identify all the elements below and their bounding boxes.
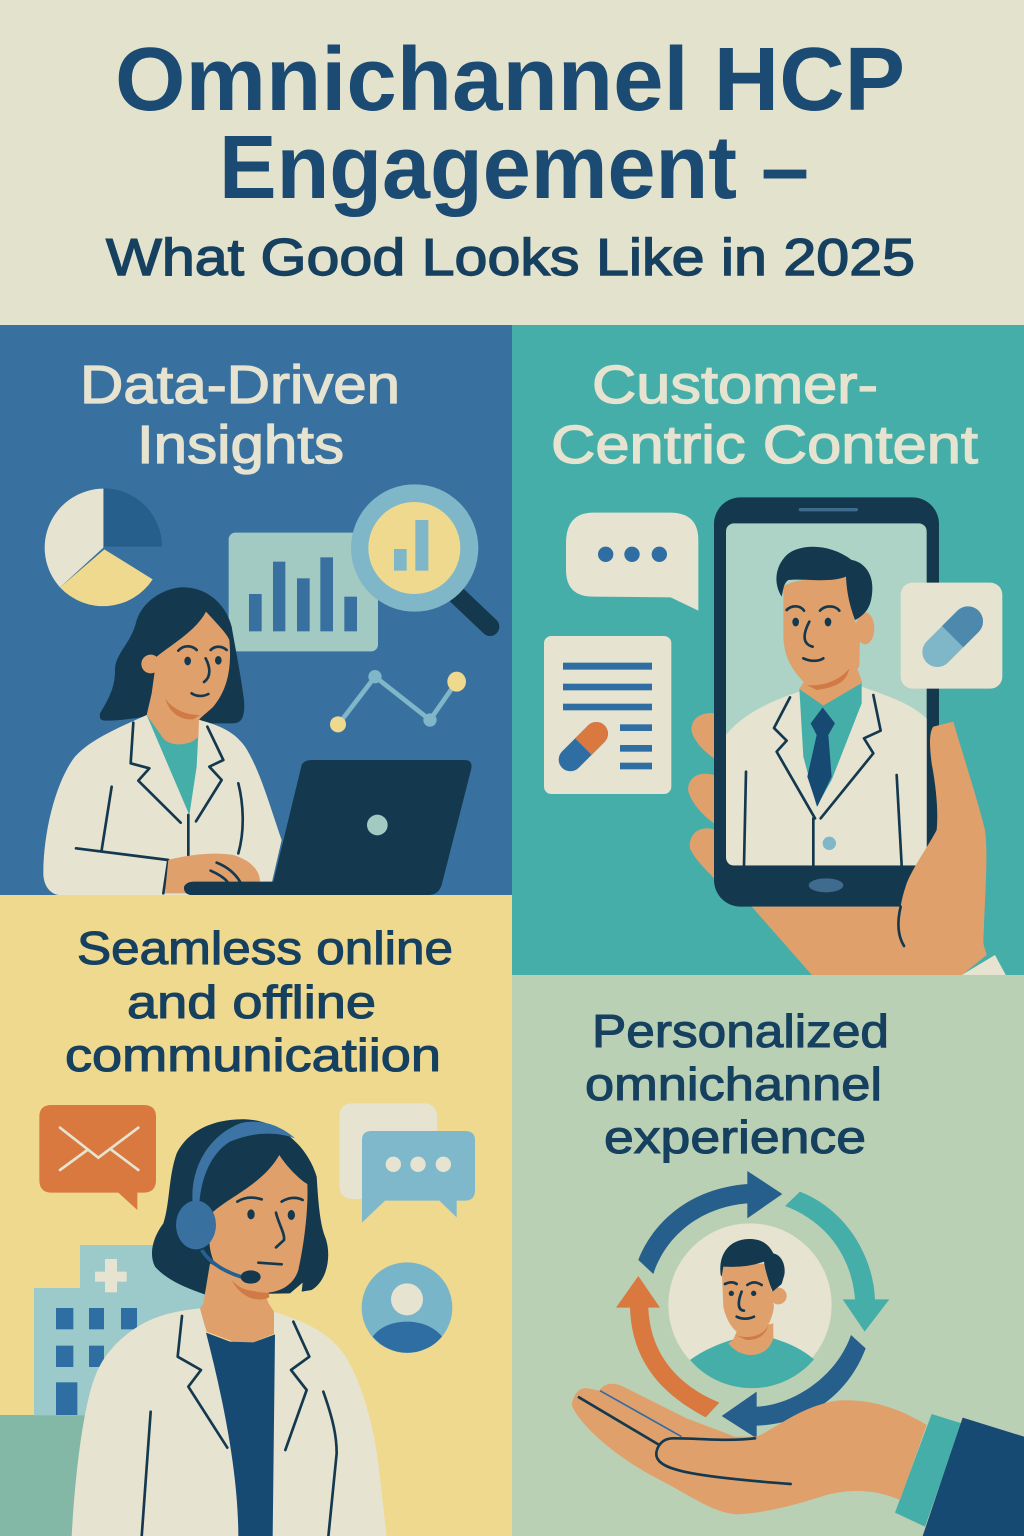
heading: personalized omnichannel experience: experience xyxy=(604,1111,866,1163)
arrow: right xyxy=(785,1192,889,1332)
title xyxy=(106,30,915,287)
arrow: bottom xyxy=(722,1335,866,1438)
avatar in circle xyxy=(668,1223,832,1388)
arrow: top xyxy=(638,1171,782,1274)
illustration: analyst with laptop and charts xyxy=(43,484,490,895)
heading: customer-centric content: Customer- xyxy=(592,355,878,415)
heading: personalized omnichannel experience: Personalized xyxy=(592,1005,889,1057)
open hand with sleeve xyxy=(572,1384,1024,1536)
heading: data-driven insights xyxy=(80,355,400,475)
heading: seamless online and offline communication xyxy=(65,922,453,1081)
illustration: cycle over open hand xyxy=(572,1171,1024,1536)
icon: chat bubble xyxy=(566,513,698,611)
heading: personalized omnichannel experience: omnichannel xyxy=(585,1058,882,1110)
heading: seamless online and offline communication: Seamless online xyxy=(77,922,453,974)
icon: pill card xyxy=(901,583,1002,689)
icon: headset xyxy=(176,1122,295,1284)
heading: customer-centric content xyxy=(551,355,978,475)
arrow: left xyxy=(616,1276,719,1417)
icon: user avatar xyxy=(362,1262,452,1353)
panel: seamless communication xyxy=(0,895,512,1536)
line chart xyxy=(330,670,466,732)
icon: chat bubbles xyxy=(339,1103,475,1223)
illustration: doctor on phone xyxy=(544,497,1007,977)
icon: smartphone xyxy=(714,497,939,907)
person: analyst xyxy=(43,587,282,895)
person: agent xyxy=(72,1119,387,1536)
heading: data-driven insights: Insights xyxy=(137,415,344,475)
title: Engagement – xyxy=(219,118,809,218)
icon: document with pill xyxy=(544,636,671,794)
heading: seamless online and offline communication: and offline xyxy=(127,976,376,1028)
panel: customer-centric content xyxy=(512,325,1024,977)
panel: personalized omnichannel experience xyxy=(512,975,1024,1536)
heading: data-driven insights: Data-Driven xyxy=(80,355,400,415)
bar chart card xyxy=(229,533,378,651)
title: What Good Looks Like in 2025 xyxy=(106,229,915,287)
person: doctor on screen xyxy=(726,547,927,865)
icon: hospital xyxy=(34,1245,205,1415)
ground xyxy=(0,1415,87,1536)
left fingers xyxy=(688,713,714,878)
hand holding phone xyxy=(752,722,1007,977)
pie chart xyxy=(45,488,162,606)
heading: personalized omnichannel experience xyxy=(585,1005,889,1163)
icon: email bubble xyxy=(39,1105,156,1210)
icon: laptop xyxy=(184,760,472,895)
panel: data-driven insights xyxy=(0,325,512,895)
icon: magnifier xyxy=(351,484,490,627)
illustration: agent with headset xyxy=(0,1103,475,1536)
heading: seamless online and offline communication: communicatiion xyxy=(65,1029,441,1081)
heading: customer-centric content: Centric Content xyxy=(551,415,978,475)
title: Omnichannel HCP xyxy=(115,30,905,130)
